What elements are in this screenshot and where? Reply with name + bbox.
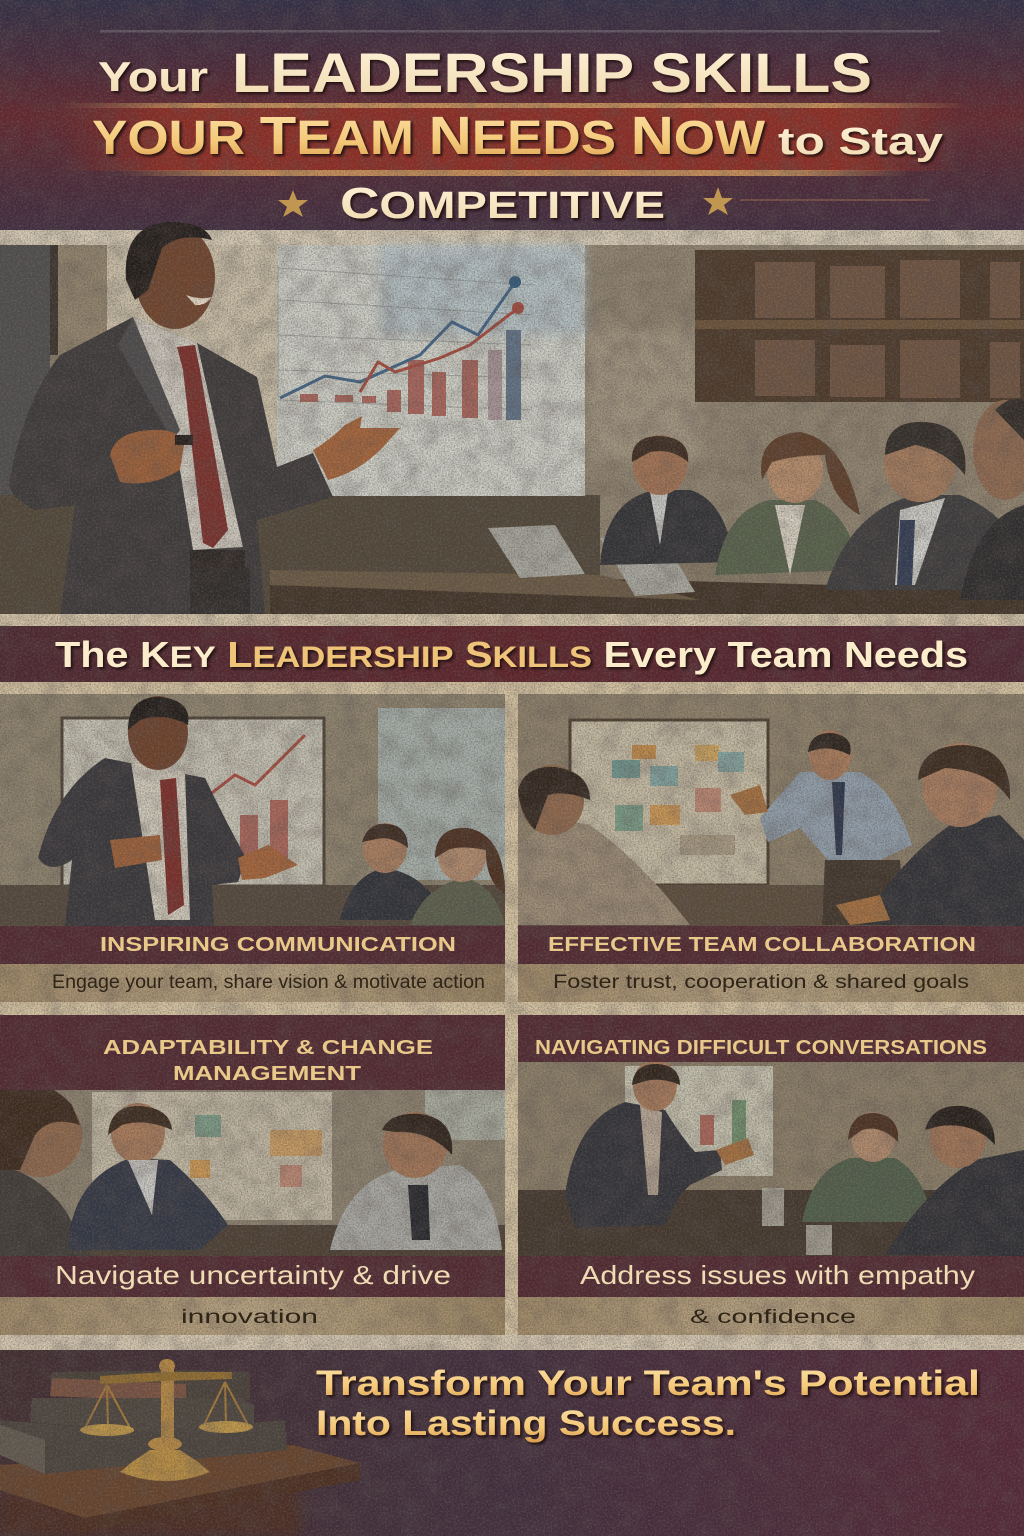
presenter [565,1059,754,1228]
title: COMPETITIVE [340,179,665,228]
section heading: The K EY LEADERSHIP SKILLS Every Team Needs [55,634,968,675]
man on right [885,1106,1024,1256]
closing message: Into Lasting Success. [316,1404,736,1443]
panel: adaptability [0,1083,505,1256]
title banner background [0,0,1024,232]
label: adaptability [103,1037,433,1085]
panel: inspiring communication [0,694,505,926]
label: adaptability: ADAPTABILITY & CHANGE [103,1037,433,1059]
icon: right star [703,187,733,215]
icon: left star [278,190,308,217]
title: to Stay [778,121,943,163]
table [270,570,1024,615]
label: team collaboration: EFFECTIVE TEAM COLLABORATION [548,934,976,956]
laptops [488,525,695,596]
seated man left [518,765,690,925]
icon: balance scales [80,1359,253,1481]
water glasses [762,1188,832,1255]
audience [600,399,1024,600]
seated man right [836,743,1024,926]
title: LEADERSHIP SKILLS [232,41,872,104]
label: inspiring communication: INSPIRING COMMUNICATION [100,934,456,956]
caption band: inspiring communication [0,964,505,1002]
chart board [62,718,324,886]
section heading band [0,626,1024,694]
label band: adaptability [0,1015,505,1090]
label band: team collaboration [518,926,1024,964]
presenter [38,696,298,926]
caption band: team collaboration [518,964,1024,1002]
icon: book plinth [0,1445,360,1534]
caption: difficult conversations: & confidence [690,1307,856,1328]
projected chart screen [107,245,585,496]
caption bands: difficult conversations [518,1256,1024,1335]
caption: difficult conversations [580,1260,975,1328]
title [92,41,943,228]
caption: inspiring communication: Engage your team, share vision & motivate action [52,972,485,993]
panel: team collaboration [518,694,1024,926]
panel: difficult conversations [518,1059,1024,1256]
label band: inspiring communication [0,926,505,964]
title: YOUR TEAM NEEDS NOW [92,106,766,166]
seated colleagues [340,823,505,925]
bookshelf [695,250,1024,402]
standing presenter [730,730,912,925]
caption: difficult conversations: Address issues with empathy [580,1260,975,1290]
label: difficult conversations: NAVIGATING DIFFICULT CONVERSATIONS [535,1037,987,1059]
caption: team collaboration: Foster trust, cooperation & shared goals [553,972,969,993]
caption: adaptability: innovation [181,1307,318,1328]
label: adaptability: MANAGEMENT [173,1063,361,1085]
man on right [330,1112,502,1250]
icon: stacked books [0,1370,287,1474]
caption bands: adaptability [0,1256,505,1335]
closing message [316,1364,980,1443]
closing message: Transform Your Team's Potential [316,1364,980,1403]
caption: adaptability [55,1260,451,1328]
label band: difficult conversations [518,1015,1024,1062]
caption: adaptability: Navigate uncertainty & drive [55,1260,451,1290]
woman [802,1112,932,1222]
presenter [9,222,400,615]
title: Your [98,53,208,100]
sticky-note board [570,720,768,885]
chart board [625,1066,773,1176]
footer band [0,694,1024,1536]
man in centre [68,1103,228,1250]
man far left [0,1083,92,1256]
planning board [92,1092,332,1220]
hero illustration [0,222,1024,626]
